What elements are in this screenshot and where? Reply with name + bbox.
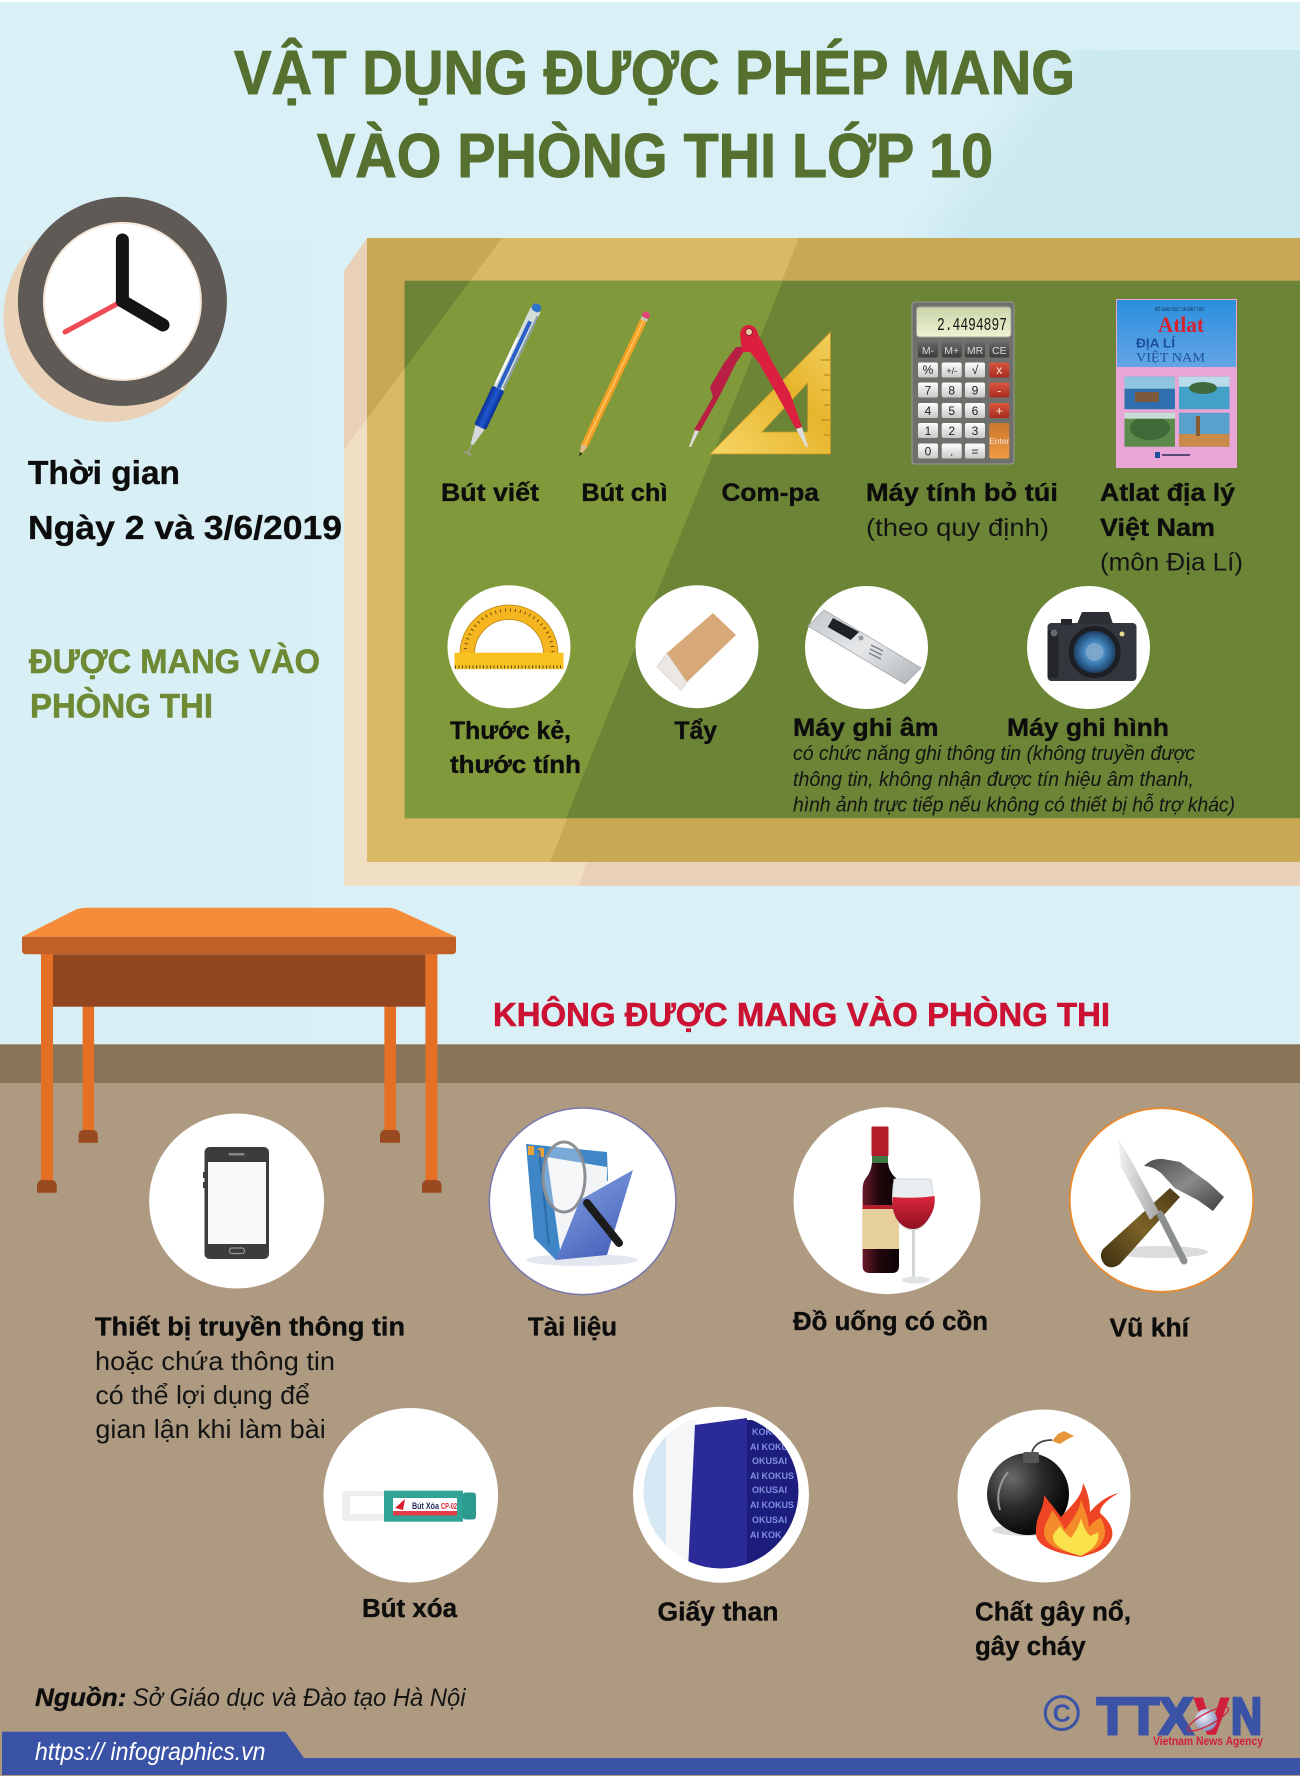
logo: TTXVN copyright: C <box>1053 1700 1071 1728</box>
icon: pocket calculator: 2.4494897 <box>937 316 1007 336</box>
label: alcoholic drinks: Đồ uống có cồn <box>793 1308 988 1336</box>
icon: pocket calculator: +/- <box>946 366 957 376</box>
label: weapons: Vũ khí <box>1110 1315 1190 1343</box>
icon: carbon paper <box>633 1407 809 1583</box>
icon: pocket calculator: √ <box>972 363 979 377</box>
icon: correction pen: Bút Xóa <box>412 1501 440 1512</box>
text: exam time <box>28 455 342 547</box>
icon: bomb and fire <box>958 1410 1130 1582</box>
icon: compass and set square <box>689 325 830 454</box>
icon: pocket calculator: + <box>996 404 1003 418</box>
heading: allowed items: ĐƯỢC MANG VÀO <box>29 643 320 681</box>
text: communication devices: Thiết bị truyền thông tin <box>95 1314 405 1342</box>
labels: first row of allowed items: Máy tính bỏ túi <box>866 479 1058 507</box>
heading: prohibited items: KHÔNG ĐƯỢC MANG VÀO PHÒNG THI <box>493 995 1110 1034</box>
heading: allowed items: PHÒNG THI <box>30 688 213 726</box>
icon: wine bottle and glass <box>794 1107 980 1294</box>
icon: pocket calculator: MR <box>967 345 984 357</box>
heading: allowed items <box>29 643 320 726</box>
text: recorder note: thông tin, không nhận được tín hiệu âm thanh, <box>793 769 1194 791</box>
icon: Atlat book cover <box>1116 299 1237 468</box>
icon: pocket calculator: 4 <box>925 404 932 418</box>
labels: second row of allowed items: Máy ghi hình <box>1007 714 1169 742</box>
icon: knife and hammer <box>1070 1108 1253 1292</box>
labels: first row of allowed items <box>441 479 1243 576</box>
icon: protractor and ruler <box>448 585 570 708</box>
labels: first row of allowed items: Việt Nam <box>1100 514 1215 542</box>
icon: Atlat book cover: BỘ GIÁO DỤC VÀ ĐÀO TẠO <box>1155 306 1204 313</box>
title <box>234 39 1075 191</box>
icon: eraser <box>636 585 758 708</box>
icon: pocket calculator <box>912 302 1014 464</box>
icon: pocket calculator: 6 <box>972 404 979 418</box>
logo: TTXVN copyright: V <box>1194 1688 1229 1746</box>
icon: camera <box>1027 586 1150 709</box>
icon: Atlat book cover: ĐỊA LÍ <box>1136 336 1175 350</box>
labels: second row of allowed items: thước tính <box>450 751 581 779</box>
icon: pocket calculator: CE <box>992 345 1007 357</box>
icon: pocket calculator: . <box>950 444 953 458</box>
label: explosives <box>975 1599 1131 1661</box>
text: source: Sở Giáo dục và Đào tạo Hà Nội <box>133 1684 467 1712</box>
icon: pocket calculator: 8 <box>948 384 955 398</box>
labels: first row of allowed items: Atlat địa lý <box>1100 479 1235 507</box>
labels: first row of allowed items: (theo quy định) <box>866 514 1049 542</box>
icon: pocket calculator: M+ <box>944 345 959 357</box>
icon: pocket calculator: - <box>997 384 1001 398</box>
icon: pocket calculator: 9 <box>972 384 979 398</box>
labels: second row of allowed items <box>450 714 1169 779</box>
icon: documents folder with magnifier <box>489 1108 676 1295</box>
text: communication devices <box>95 1314 405 1444</box>
background: sky wall <box>0 0 1300 238</box>
icon: pocket calculator: % <box>923 363 934 377</box>
label: explosives: Chất gây nổ, <box>975 1599 1131 1627</box>
icon: desk <box>22 908 456 1193</box>
icon: pocket calculator: M- <box>922 345 935 357</box>
icon: correction pen <box>324 1408 498 1583</box>
icon: pocket calculator: 5 <box>948 404 955 418</box>
footer bar with URL tab: https:// infographics.vn <box>35 1738 266 1766</box>
icon: carbon paper: AI KOKUS <box>750 1442 794 1452</box>
label: explosives: gây cháy <box>975 1633 1087 1661</box>
icon: correction pen: CP-02 <box>441 1502 457 1511</box>
logo: TTXVN copyright <box>1045 1688 1264 1748</box>
icon: pocket calculator: 2 <box>948 424 955 438</box>
text: communication devices: gian lận khi làm bài <box>95 1414 326 1444</box>
icon: carbon paper: KOKUSAI <box>752 1427 794 1437</box>
text: recorder note <box>793 743 1235 816</box>
logo: TTXVN copyright: TTX <box>1097 1688 1193 1746</box>
logo: TTXVN copyright: Vietnam News Agency <box>1153 1736 1264 1748</box>
labels: first row of allowed items: Com-pa <box>722 479 820 507</box>
icon: carbon paper: AI KOKUS <box>750 1471 794 1481</box>
labels: second row of allowed items: Thước kẻ, <box>450 717 571 745</box>
icon: pocket calculator: 3 <box>972 424 979 438</box>
icon: pencil <box>576 311 651 458</box>
icon: pocket calculator: 0 <box>925 444 932 458</box>
icon: carbon paper: OKUSAI <box>752 1456 787 1466</box>
labels: first row of allowed items: (môn Địa Lí) <box>1100 548 1243 576</box>
labels: first row of allowed items: Bút chì <box>581 479 667 507</box>
icon: pocket calculator: = <box>971 444 979 458</box>
icon: pen <box>461 301 544 457</box>
floor and baseboard <box>0 1044 1300 1776</box>
icon: smartphone <box>149 1114 324 1288</box>
label: correction pen: Bút xóa <box>362 1595 458 1623</box>
text: recorder note: hình ảnh trực tiếp nếu không có thiết bị hỗ trợ khác) <box>793 794 1235 816</box>
title: VẬT DỤNG ĐƯỢC PHÉP MANG <box>234 39 1075 108</box>
logo: TTXVN copyright: N <box>1231 1688 1262 1746</box>
icon: carbon paper: AI KOKUS <box>750 1500 794 1510</box>
label: carbon paper: Giấy than <box>658 1599 778 1627</box>
text: exam time: Thời gian <box>28 455 180 492</box>
text: exam time: Ngày 2 và 3/6/2019 <box>28 510 342 547</box>
panel: chalkboard <box>344 238 1300 886</box>
icon: voice recorder <box>805 586 928 709</box>
title: VÀO PHÒNG THI LỚP 10 <box>317 122 993 191</box>
labels: first row of allowed items: Bút viết <box>441 479 540 507</box>
icon: pocket calculator: 7 <box>925 384 932 398</box>
icon: carbon paper: OKUSAI <box>752 1515 787 1525</box>
icon: pocket calculator: Enter <box>989 436 1010 446</box>
text: communication devices: hoặc chứa thông tin <box>95 1346 335 1376</box>
label: documents: Tài liệu <box>528 1314 617 1342</box>
text: communication devices: có thể lợi dụng để <box>95 1380 310 1410</box>
labels: second row of allowed items: Máy ghi âm <box>793 714 938 742</box>
icon: pocket calculator: 1 <box>925 424 932 438</box>
text: recorder note: có chức năng ghi thông tin (không truyền được <box>793 743 1195 765</box>
footer bar with URL tab <box>2 1732 1300 1775</box>
labels: second row of allowed items: Tẩy <box>674 717 717 745</box>
icon: carbon paper: AI KOK <box>750 1530 782 1540</box>
icon: pocket calculator: x <box>996 363 1002 377</box>
text: source: Nguồn: <box>35 1684 126 1712</box>
icon: wall clock <box>4 197 227 422</box>
icon: Atlat book cover: Atlat <box>1158 312 1205 337</box>
icon: carbon paper: OKUSAI <box>752 1485 787 1495</box>
icon: Atlat book cover: VIỆT NAM <box>1136 350 1205 364</box>
